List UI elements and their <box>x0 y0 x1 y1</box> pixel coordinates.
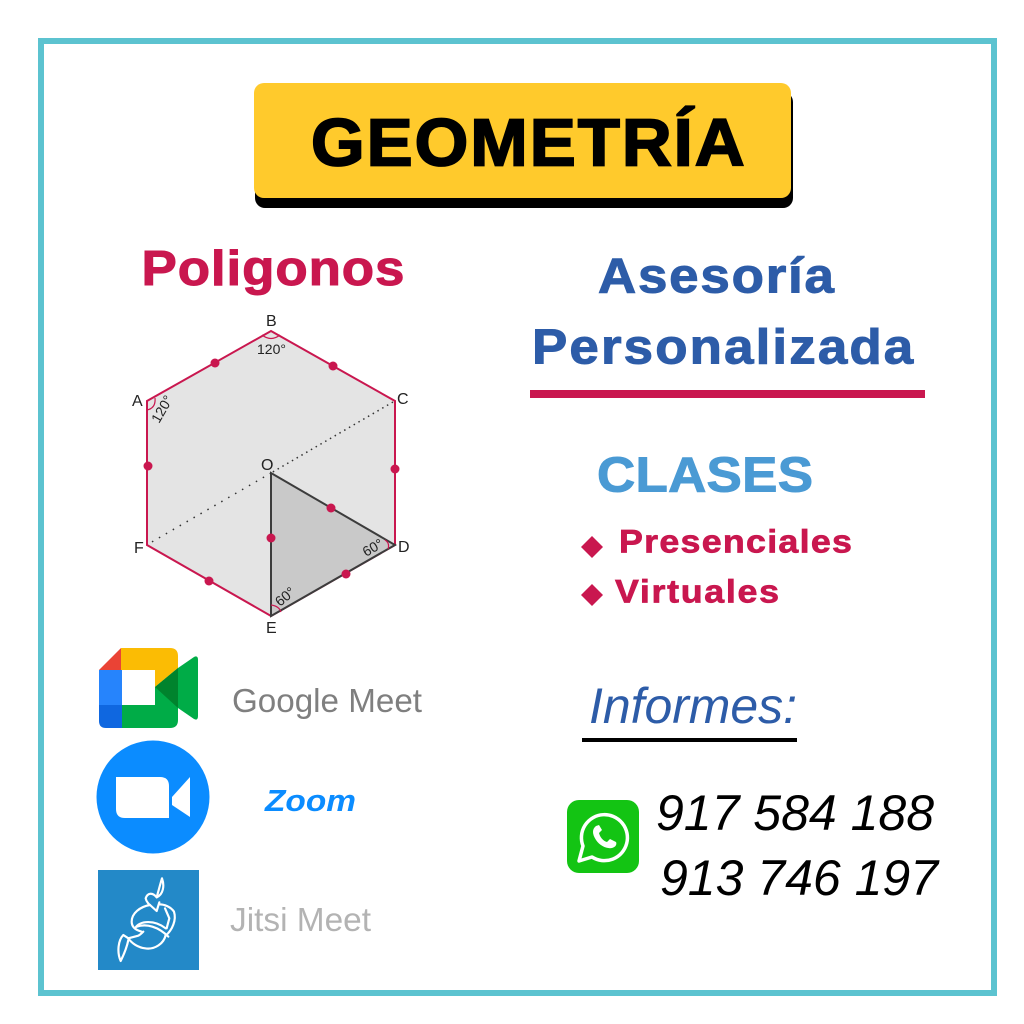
hexagon diagram: D <box>398 539 410 556</box>
divider: pink <box>530 390 925 398</box>
icon: Jitsi Meet <box>98 870 199 970</box>
phone numbers: 913 746 197 <box>660 850 940 906</box>
phone numbers: 917 584 188 <box>656 785 934 841</box>
hexagon diagram: A <box>132 393 143 410</box>
heading: Informes: Informes: <box>589 678 797 734</box>
list: class types <box>581 524 852 610</box>
label: Zoom: Zoom <box>264 783 356 818</box>
icon: Google Meet <box>99 648 198 728</box>
heading: Asesoría Personalizada: Asesoría <box>598 248 835 303</box>
phone numbers <box>656 785 940 906</box>
hexagon diagram: B <box>266 313 277 330</box>
hexagon diagram: 60° <box>272 583 298 609</box>
label: Jitsi Meet: Jitsi Meet <box>230 901 371 938</box>
list: class types: Virtuales <box>615 574 779 610</box>
label: Google Meet: Google Meet <box>232 682 422 719</box>
hexagon diagram: O <box>261 457 273 474</box>
heading: Asesoría Personalizada: Personalizada <box>532 319 914 374</box>
title banner: GEOMETRÍA <box>311 105 745 180</box>
heading: CLASES: CLASES <box>597 447 813 502</box>
hexagon diagram: F <box>134 540 144 557</box>
heading: Asesoría Personalizada <box>532 248 914 374</box>
hexagon diagram <box>132 313 410 637</box>
heading: Poligonos: Poligonos <box>142 241 404 296</box>
icon: Zoom <box>96 740 210 854</box>
list: class types: Presenciales <box>619 524 852 560</box>
hexagon diagram: 120° <box>148 392 176 426</box>
hexagon diagram: C <box>397 391 409 408</box>
hexagon diagram: E <box>266 620 277 637</box>
icon: WhatsApp <box>567 800 639 873</box>
hexagon diagram: 120° <box>257 341 286 357</box>
hexagon diagram: 60° <box>360 535 386 560</box>
title banner <box>254 83 793 208</box>
